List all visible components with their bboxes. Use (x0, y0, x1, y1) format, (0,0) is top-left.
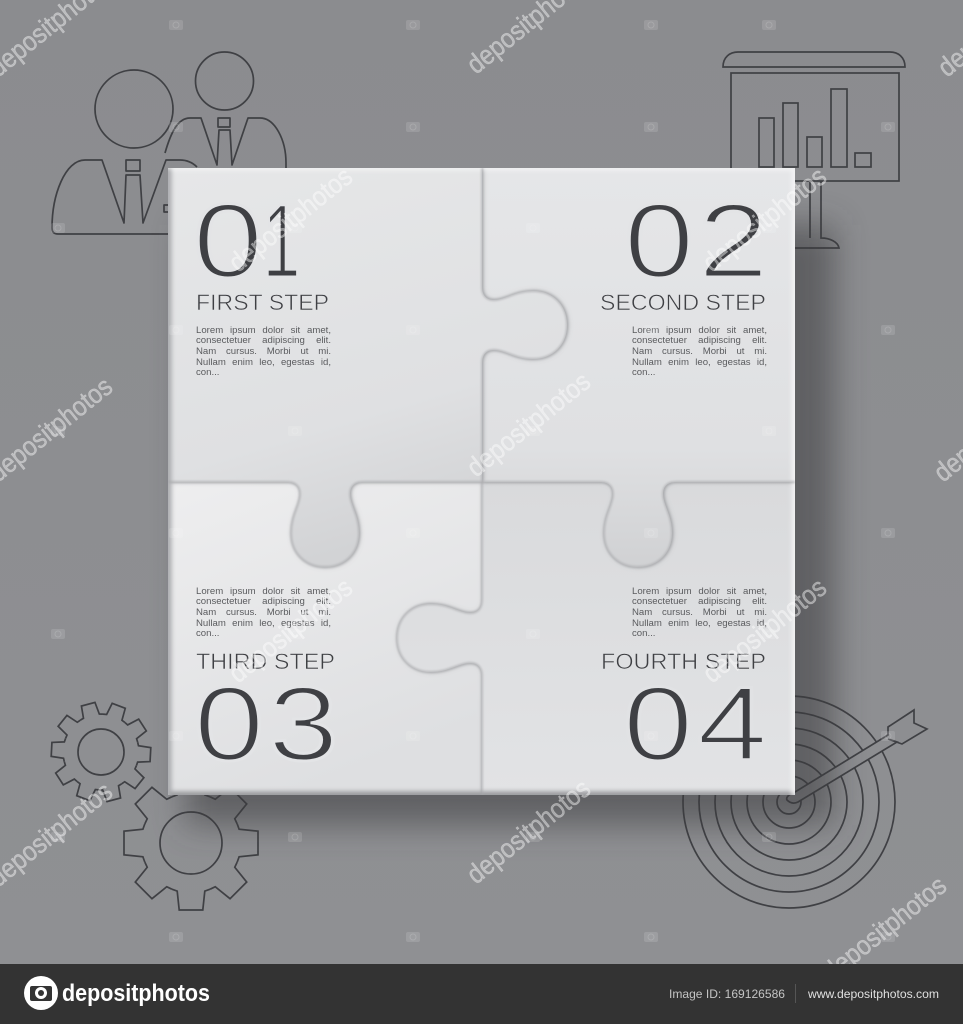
heading: first step: FIRST STEP (196, 290, 329, 315)
icon: presentation board (723, 52, 905, 248)
body text: Nam cursus. Morbi ut mi. (632, 346, 767, 357)
body text: Nullam enim leo, egestas id, (196, 357, 331, 368)
number 01: 0 (193, 182, 267, 300)
puzzle piece 4 (397, 482, 795, 795)
body text: consectetuer adipiscing elit. (632, 596, 767, 607)
heading: second step: SECOND STEP (600, 290, 766, 315)
body text: con... (196, 367, 219, 378)
number 01: 1 (262, 182, 303, 300)
seam shading (168, 168, 795, 795)
number 03: 03 (194, 665, 343, 783)
watermark text: depositphotos (223, 572, 358, 689)
body text: Nullam enim leo, egestas id, (196, 618, 331, 629)
body text (196, 326, 331, 382)
body text: Nam cursus. Morbi ut mi. (196, 607, 331, 618)
watermark text: depositphotos (697, 572, 832, 689)
puzzle piece 3 (168, 482, 482, 795)
puzzle piece 1 (168, 168, 567, 567)
footer logo text: depositphotos (62, 980, 210, 1007)
heading: third step: THIRD STEP (196, 649, 335, 674)
watermark text: depositphotos (223, 161, 358, 278)
body text: consectetuer adipiscing elit. (196, 596, 331, 607)
watermark text: depositphotos (461, 773, 596, 890)
body text: consectetuer adipiscing elit. (632, 335, 767, 346)
body text: Nam cursus. Morbi ut mi. (196, 346, 331, 357)
step 04 (601, 586, 772, 783)
body text (632, 326, 767, 382)
board edge bevel (168, 168, 795, 795)
number 04: 04 (623, 665, 772, 783)
body text (196, 586, 331, 642)
body text: con... (632, 628, 655, 639)
number 01 (193, 182, 303, 300)
step 03 (194, 586, 343, 783)
body text: consectetuer adipiscing elit. (196, 335, 331, 346)
website url: www.depositphotos.com (807, 987, 939, 1001)
body text (632, 586, 767, 642)
watermark text: depositphotos (817, 870, 952, 987)
icon: gears (51, 701, 258, 910)
footer bar (0, 964, 963, 1024)
watermark text: depositphotos (697, 161, 832, 278)
footer logo icon (24, 976, 58, 1010)
step 01 (193, 182, 331, 382)
icon: business people (52, 52, 286, 234)
icon: target with arrow (683, 696, 927, 908)
body text: Nam cursus. Morbi ut mi. (632, 607, 767, 618)
watermark camera marks (51, 20, 895, 942)
image id: Image ID: 169126586 (669, 987, 785, 1001)
board shadow (185, 225, 835, 825)
body text: Nullam enim leo, egestas id, (632, 357, 767, 368)
body text: Nullam enim leo, egestas id, (632, 618, 767, 629)
heading: fourth step: FOURTH STEP (601, 649, 766, 674)
step 02 (600, 182, 773, 382)
puzzle board (168, 168, 795, 795)
body text: con... (632, 367, 655, 378)
puzzle piece 2 (482, 168, 795, 567)
number 02: 02 (624, 182, 773, 300)
body text: con... (196, 628, 219, 639)
watermark text: depositphotos (461, 366, 596, 483)
